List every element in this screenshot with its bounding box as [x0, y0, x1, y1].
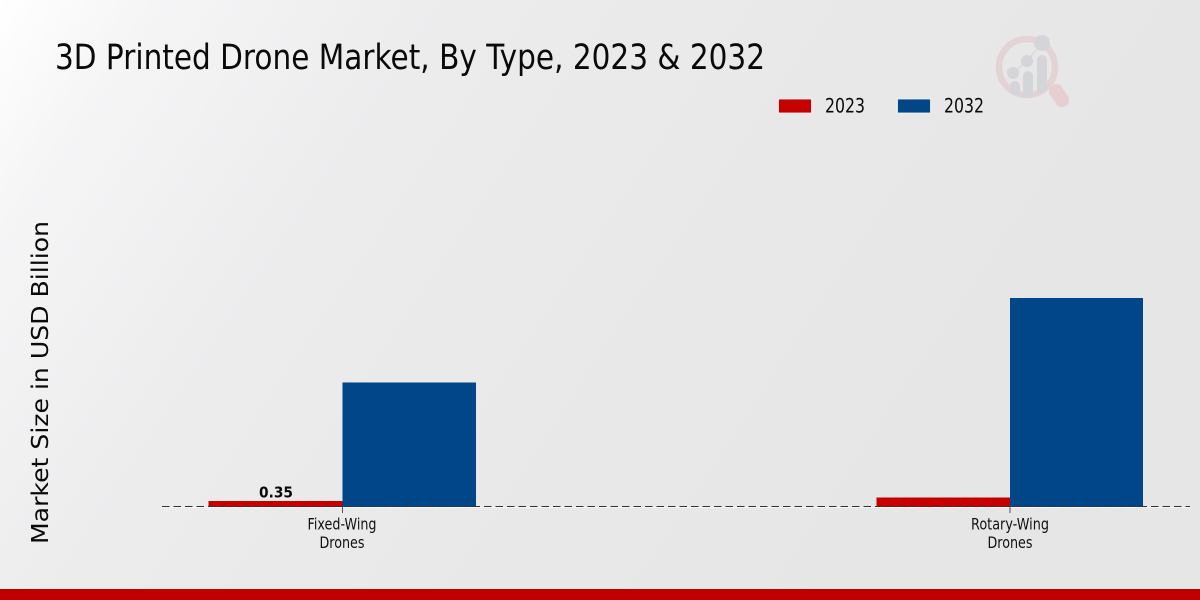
axis baseline: [162, 506, 1190, 508]
legend label 2023: 2023: [825, 94, 865, 118]
bar: Fixed-Wing 2023: [208, 501, 342, 508]
watermark logo icon: [999, 35, 1062, 111]
legend label 2032: 2032: [944, 94, 984, 118]
legend: [778, 94, 984, 118]
value label 0.35: 0.35: [259, 484, 293, 502]
bar: Rotary-Wing 2023: [876, 498, 1010, 508]
bar: Rotary-Wing 2032: [1010, 298, 1143, 508]
category label Rotary-Wing Drones: Drones: [988, 533, 1032, 552]
legend swatch 2023: [778, 99, 812, 113]
bar chart: [162, 298, 1190, 552]
bottom red band: [0, 589, 1200, 600]
tick marks: [342, 507, 1010, 513]
title: 3D Printed Drone Market, By Type, 2023 & 2032: [55, 38, 765, 78]
category label Fixed-Wing Drones: Fixed-Wing: [308, 514, 376, 534]
category label Rotary-Wing Drones: Rotary-Wing: [971, 514, 1049, 534]
legend swatch 2032: [898, 99, 930, 113]
category label Fixed-Wing Drones: Drones: [320, 533, 364, 552]
category label Rotary-Wing Drones: [971, 514, 1049, 552]
y-axis title: Market Size in USD Billion: [28, 221, 54, 544]
bar: Fixed-Wing 2032: [342, 382, 476, 508]
category label Fixed-Wing Drones: [308, 514, 376, 552]
